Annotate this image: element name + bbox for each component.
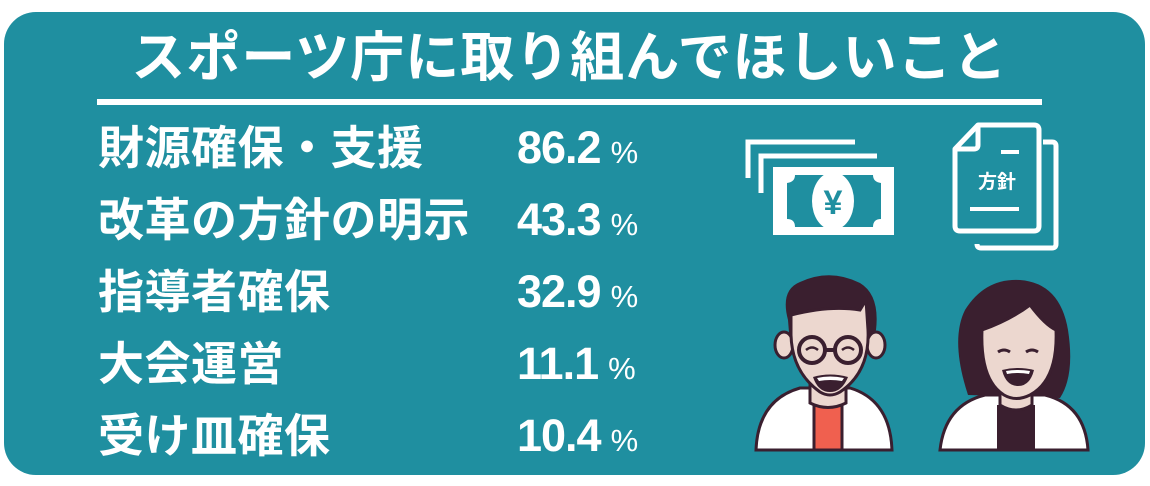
icon: man with glasses — [754, 275, 894, 452]
row 4: 11.1 % — [517, 338, 636, 389]
row 3 — [98, 266, 638, 318]
row 4 — [98, 338, 636, 390]
title: スポーツ庁に取り組んでほしいこと — [131, 28, 1008, 88]
icon: policy document — [952, 122, 1058, 250]
row 2 — [98, 194, 638, 246]
row 4: 大会運営 — [98, 338, 284, 390]
icon: money bills — [746, 140, 894, 235]
row 1 — [98, 122, 638, 174]
list: items and percentages — [98, 122, 638, 462]
icon: money bills: ¥ — [824, 184, 843, 222]
row 1: 86.2 % — [517, 122, 638, 173]
row 2: 改革の方針の明示 — [98, 194, 470, 246]
row 5 — [98, 410, 638, 462]
row 5: 受け皿確保 — [98, 410, 330, 462]
row 2: 43.3 % — [517, 194, 638, 245]
icon: policy document: 方針 — [978, 170, 1016, 193]
row 1: 財源確保・支援 — [98, 122, 424, 174]
row 3: 32.9 % — [517, 266, 638, 317]
row 5: 10.4 % — [517, 410, 638, 461]
icon: woman — [938, 280, 1090, 452]
row 3: 指導者確保 — [98, 266, 330, 318]
